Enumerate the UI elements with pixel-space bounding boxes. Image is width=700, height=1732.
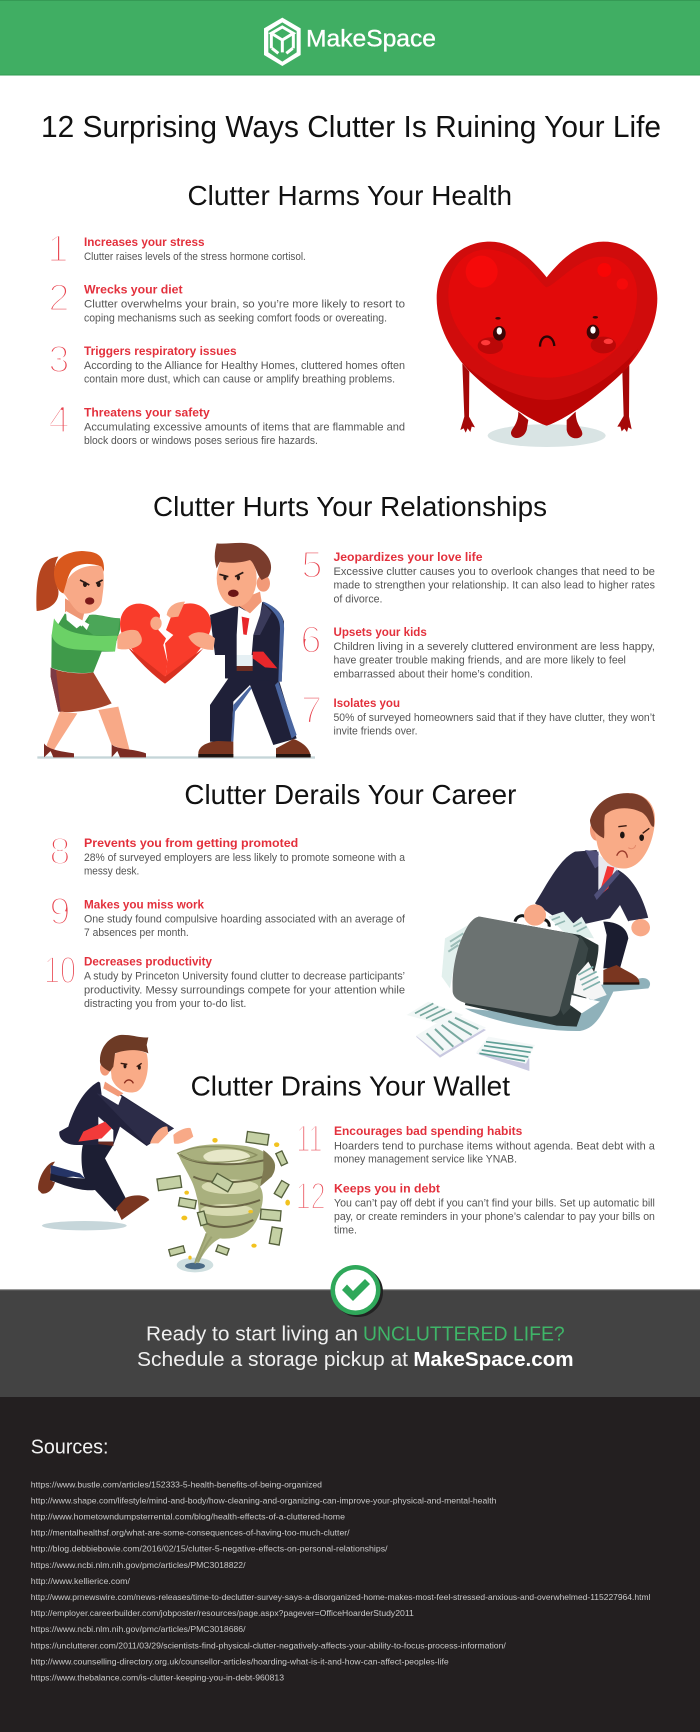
item 5 [301,544,655,605]
heading: wallet: Clutter Drains Your Wallet [191,1071,510,1102]
call to action text: Schedule a storage pickup at [137,1348,408,1371]
item 11: Hoarders tend to purchase items without agenda. Beat debt with a [334,1140,655,1152]
item 9: Makes you miss work [84,897,204,911]
item 5: Jeopardizes your love life [334,550,483,564]
item 1 [47,228,306,270]
item 8 [49,831,405,878]
item 2: coping mechanisms such as seeking comfort foods or overeating. [84,312,387,324]
icon: MakeSpace logo [264,18,301,66]
item 8: 28% of surveyed employers are less likely to promote someone with a [84,852,405,864]
item 7: Isolates you [334,696,400,710]
item 11 [296,1118,655,1166]
sources heading: Sources: [31,1436,108,1458]
item 2: Wrecks your diet [84,283,183,297]
item 2 [48,278,405,324]
item 7 [301,690,655,738]
item 5: 5 [301,544,323,586]
item 11: Encourages bad spending habits [334,1124,523,1138]
woman [36,551,146,757]
item 6: Upsets your kids [334,625,427,639]
item 6: 6 [300,620,322,662]
panel: relationship list [300,544,655,738]
item 12: Keeps you in debt [334,1181,440,1195]
heading: relationships: Clutter Hurts Your Relationships [153,491,547,522]
item 5: made to strengthen your relationship. It can also lead to higher rates [334,580,655,592]
sources list: http://employer.careerbuilder.com/jobposter/resources/page.aspx?pagever=OfficeHoarderStudy2011 [31,1608,414,1618]
broken heart [120,603,211,684]
item 10: 10 [44,950,76,992]
bills [157,1132,289,1256]
item 10: productivity. Messy surroundings compete for your attention while [84,984,405,996]
item 9: One study found compulsive hoarding associated with an average of [84,913,405,925]
item 3 [48,339,405,386]
item 11: 11 [296,1118,322,1160]
item 11: money management service like YNAB. [334,1154,517,1166]
item 12: pay, or create reminders in your phone’s calendar to pay your bills on [334,1211,655,1223]
item 10: Decreases productivity [84,954,212,968]
item 4: 4 [48,400,70,442]
sources list: http://mentalhealthsf.org/what-are-some-consequences-of-having-too-much-clutter/ [31,1528,350,1538]
panel: career list [44,831,405,1010]
item 3: 3 [48,339,70,381]
illustration: money tornado [157,1132,290,1272]
item 4: Threatens your safety [84,405,210,419]
item 7: 50% of surveyed homeowners said that if they have clutter, they won’t [334,712,655,724]
item 6 [300,620,655,680]
call to action text: Ready to start living an [146,1323,358,1346]
header band [0,0,700,76]
coins [181,1138,290,1260]
item 6: have greater trouble making friends, and are more likely to feel [334,655,626,667]
item 9 [49,891,405,939]
sources list: https://www.ncbi.nlm.nih.gov/pmc/articles/PMC3018686/ [31,1624,246,1634]
sources list: http://blog.debbiebowie.com/2016/02/15/clutter-5-negative-effects-on-personal-relationships/ [31,1544,388,1554]
sources list: http://www.counselling-directory.org.uk/counsellor-articles/hoarding-what-is-it-and-how-can-affect-peoples-life [31,1656,449,1666]
item 4: block doors or windows poses serious fire hazards. [84,435,318,447]
illustration: couple tearing a heart [36,543,315,759]
sources list: http://www.hometowndumpsterrental.com/blog/health-effects-of-a-cluttered-home [31,1512,345,1522]
heading: career: Clutter Derails Your Career [184,779,516,810]
item 4: Accumulating excessive amounts of items that are flammable and [84,421,405,433]
panel: call to action [0,1265,700,1397]
sources list: https://www.ncbi.nlm.nih.gov/pmc/articles/PMC3018822/ [31,1560,246,1570]
item 12: You can’t pay off debt if you can’t find your bills. Set up automatic bill [334,1197,655,1209]
item 4 [48,400,405,447]
sources list: http://www.kellierice.com/ [31,1576,131,1586]
sources list: https://unclutterer.com/2011/03/29/scientists-find-physical-clutter-negatively-affects-your-ability-to-focus-process-information/ [31,1640,506,1650]
item 9: 9 [49,891,71,933]
call to action text: UNCLUTTERED LIFE? [363,1323,565,1346]
sources list: http://www.prnewswire.com/news-releases/time-to-declutter-survey-says-a-disorganized-home-makes-most-feel-stressed-anxious-and-overwhelmed-115227964.html [31,1592,650,1602]
hands on the heart [117,602,215,650]
panel: wallet list [296,1118,655,1237]
illustration: running man [38,1035,193,1230]
icon: check badge [330,1265,383,1317]
man [198,543,311,757]
item 9: 7 absences per month. [84,927,189,939]
item 7: 7 [301,690,322,732]
item 8: messy desk. [84,866,139,878]
item 6: Children living in a severely cluttered environment are less happy, [334,641,655,653]
panel: sources [0,1397,700,1732]
heading: health: Clutter Harms Your Health [188,180,512,211]
item 3: contain more dust, which can cause or amplify breathing problems. [84,374,395,386]
item 6: embarrassed about their home’s condition. [334,668,533,680]
panel: health list [47,228,405,447]
illustration: man with overflowing briefcase [407,793,655,1071]
item 8: 8 [49,831,71,873]
sources list: http://www.shape.com/lifestyle/mind-and-body/how-cleaning-and-organizing-can-improve-your-physical-and-mental-health [31,1495,497,1505]
item 10: distracting you from your to-do list. [84,998,246,1010]
item 5: of divorce. [334,593,382,605]
item 5: Excessive clutter causes you to overlook changes that need to be [334,566,655,578]
logo wordmark: MakeSpace [306,26,436,53]
item 3: Triggers respiratory issues [84,344,237,358]
sources list: https://www.thebalance.com/is-clutter-keeping-you-in-debt-960813 [31,1672,284,1682]
item 8: Prevents you from getting promoted [84,836,298,850]
item 2: 2 [48,278,70,320]
item 1: Increases your stress [84,235,205,249]
sources list: https://www.bustle.com/articles/152333-5-health-benefits-of-being-organized [31,1479,322,1489]
icon: sad heart character [437,242,657,447]
item 3: According to the Alliance for Healthy Homes, cluttered homes often [84,360,405,372]
item 12: time. [334,1225,357,1237]
title: 12 Surprising Ways Clutter Is Ruining Your Life [41,109,661,144]
item 1: Clutter raises levels of the stress hormone cortisol. [84,251,306,263]
item 12: 12 [296,1176,326,1218]
call to action text: MakeSpace.com [413,1348,574,1371]
call to action text [137,1323,574,1371]
sources list [31,1479,650,1682]
item 12 [296,1176,655,1237]
item 7: invite friends over. [334,726,418,738]
item 1: 1 [47,228,69,270]
item 2: Clutter overwhelms your brain, so you’re more likely to resort to [84,299,405,311]
item 10: A study by Princeton University found clutter to decrease participants’ [84,971,405,983]
item 10 [44,950,405,1010]
